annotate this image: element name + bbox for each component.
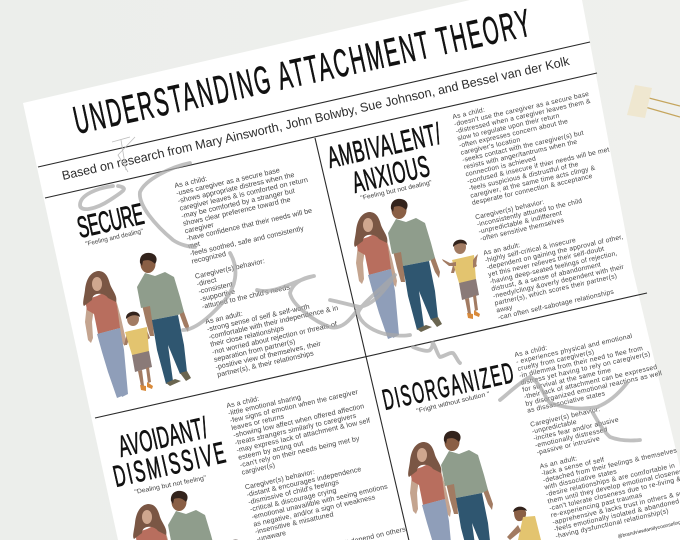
heading: disorganized: DISORGANIZED <box>379 356 516 416</box>
watermark <box>80 163 640 441</box>
illustration: secure family <box>83 253 191 398</box>
text block: avoidant: -distant & encourages independence <box>246 466 362 499</box>
text block: ambivalent: -distressed when a caregiver leaves them & <box>455 98 592 135</box>
text block: secure: -direct <box>196 276 217 288</box>
text block: disorganized: -their lack of attachment can be expressed <box>523 364 658 401</box>
text block: avoidant: -may express lack of attachment & low self <box>236 417 371 454</box>
tagline: ambivalent: "Feeling but not dealing" <box>360 179 433 202</box>
text block: ambivalent: -confused & insecure if thier needs will be met <box>466 146 610 185</box>
text block: disorganized: -in dilemma from their need to flee from <box>519 345 644 380</box>
text block: disorganized: -lack a sense of self <box>541 456 605 478</box>
text block: secure: separation from partner(s) <box>213 338 296 364</box>
text block: secure: -positive view of themselves, their <box>215 340 322 371</box>
text block: disorganized: - experiences physical and emotional <box>515 333 633 366</box>
text block: secure: caregiver <box>184 221 215 235</box>
text block: ambivalent: desperate for connection & acceptance <box>471 173 593 207</box>
text block: ambivalent: -inconsistently attuned to the child <box>476 198 583 228</box>
panel: secure <box>74 152 349 398</box>
text block: disorganized: -emotionally distressed <box>534 426 608 450</box>
text block: ambivalent: resists with anger/tantrums when the <box>463 139 578 171</box>
text block: avoidant: -showing low affect when offered affection <box>233 403 365 440</box>
heading: ambivalent: AMBIVALENT/ <box>324 118 444 175</box>
title: UNDERSTANDING ATTACHMENT THEORY <box>70 1 534 143</box>
text block: secure: -shows appropriate distress when the <box>177 171 295 205</box>
text block: avoidant: -emotional unavailible with seeing emotions <box>251 483 389 521</box>
illustration: ambivalent family <box>354 199 480 339</box>
text block: secure: their close relationships <box>210 324 285 349</box>
text block: secure: -attuned to the child's needs <box>201 283 291 311</box>
text block: avoidant: leaves or returns <box>231 413 285 432</box>
text block: ambivalent: -often expresses concern about the <box>458 118 569 150</box>
text block: ambivalent: Caregiver(s) behavior: <box>475 199 545 221</box>
text block: secure: -not worried about rejection or threats of <box>211 320 338 356</box>
text block: secure: met <box>187 240 201 250</box>
text block: secure: -uses caregiver as a secure base <box>175 166 281 198</box>
text block: ambivalent: -dependent on gaining the approval of other, <box>486 234 624 271</box>
text block: disorganized: with dissociative states <box>543 468 618 492</box>
text block: secure: -may be comforted by a stranger but <box>181 187 296 220</box>
text block: ambivalent: away <box>496 304 514 315</box>
text block: avoidant: -insensitive & misattuned <box>254 511 334 536</box>
text block: disorganized: distress yet having to rely on caregiver(s) <box>520 351 651 387</box>
illustration: disorganized family <box>408 431 541 540</box>
text block: secure: Caregiver(s) behavior: <box>194 257 265 281</box>
text block: secure: -supportive <box>199 288 236 303</box>
text block: ambivalent: caregiver's location <box>460 136 521 157</box>
text block: secure: -comfortable with their independence & in <box>208 304 339 341</box>
text block: ambivalent: caregiver, at the same time acts clingy & <box>470 165 596 200</box>
text block: secure: -feels soothed, safe and consistently <box>189 224 305 258</box>
text block: disorganized: -feels emotionally isolated & abandoned <box>553 498 680 533</box>
text block: disorganized: -incites fear and/or abusive <box>533 417 620 443</box>
text block: ambivalent: yet this never relieves their self-doubt <box>488 246 605 279</box>
text block: ambivalent: -can often self-sabotage relationships <box>497 289 615 322</box>
text block: disorganized: -having dysfunctional relationship(s) <box>555 508 670 540</box>
icon: binder clip <box>627 85 680 118</box>
text block: secure: As a child: <box>174 175 208 190</box>
heading: avoidant: DISMISSIVE <box>110 436 229 494</box>
tagline: disorganized: "Fright without solution " <box>416 391 490 415</box>
text block: avoidant: esteem by acting out <box>238 440 304 462</box>
text block: disorganized: -unpredictable <box>531 419 578 436</box>
logo mark <box>112 137 135 172</box>
text block: ambivalent: connection is achieved <box>465 156 537 178</box>
text block: ambivalent: -often sensitive themselves <box>479 217 565 243</box>
panel: ambivalent <box>324 81 643 339</box>
text block: ambivalent: As an adult: <box>483 242 521 257</box>
text block: disorganized: by disorganized emotional reactions as well <box>525 370 663 408</box>
text block: disorganized: -can't tolerate closeness due to re-living & <box>549 476 680 512</box>
text block: disorganized: cruelty from caregiver(s) <box>517 349 595 373</box>
text block: ambivalent: slow to regulate upon their return <box>457 113 560 142</box>
text block: disorganized: as dissassociative states <box>527 390 606 415</box>
text block: ambivalent: partner(s), which scores their partner(s) <box>494 273 618 307</box>
credit text: @brandviewfamilycounseling <box>617 520 680 540</box>
text block: disorganized: -desire relationships & are comfortable in <box>545 462 676 498</box>
text block: avoidant: cargiver(s) <box>241 462 276 477</box>
text block: avoidant: -treats strangers similarly to caregivers <box>234 413 357 447</box>
text block: ambivalent: -highly self-critical & insecure <box>484 237 577 264</box>
text block: avoidant: Caregiver(s) behavior: <box>244 469 316 491</box>
text block: secure: -consistent <box>198 280 233 296</box>
text block: avoidant: -critical & discourage crying <box>249 487 337 514</box>
text block: disorganized: Caregiver(s) behavior: <box>530 406 601 429</box>
text block: ambivalent: -needy/clingy &overly dependent with their <box>492 264 625 300</box>
text block: ambivalent: -having deep-seated feelings of rejection, <box>489 250 618 286</box>
heading: ambivalent <box>324 118 444 200</box>
text block: avoidant: -can't rely on their needs being met by <box>239 435 361 469</box>
heading: avoidant: AVOIDANT/ <box>115 412 211 464</box>
text block: avoidant: -dismissive of child's feelings <box>248 479 340 506</box>
text block: secure: -strong sense of self & self-worth <box>206 303 310 334</box>
text block: secure: shows clear preference toward the <box>182 196 291 228</box>
text block: disorganized: -passive or intrusive <box>536 435 601 457</box>
text block: ambivalent: distrust, & a sense of abandonment <box>491 261 602 293</box>
text block: avoidant: -little emotional sharing <box>228 394 302 417</box>
text block: ambivalent: As a child: <box>452 107 486 121</box>
tagline: avoidant: "Dealing but not feeling" <box>134 475 207 496</box>
text block: disorganized: for survival at the same time <box>522 367 612 394</box>
heading: avoidant <box>110 412 229 494</box>
text block: disorganized: As an adult: <box>539 455 578 471</box>
text block: avoidant: As a child: <box>226 396 260 410</box>
text block: disorganized: re-experiencing past traumas <box>550 492 643 519</box>
text block: disorganized: As a child: <box>514 345 548 359</box>
panel: disorganized <box>379 320 680 540</box>
text block: ambivalent: -seeks contact with the caregiver(s) but <box>462 130 584 164</box>
text block: ambivalent: -unpredictable & indifferent <box>478 210 563 236</box>
text block: ambivalent: -doesn't use the caregiver as a secure base <box>454 91 590 128</box>
text block: avoidant: -few signs of emotion when the caregiver <box>229 389 359 425</box>
illustration: avoidant family <box>133 491 255 540</box>
heading: ambivalent: ANXIOUS <box>349 150 433 200</box>
text block: secure: As an adult: <box>204 310 243 326</box>
subtitle: Based on research from Mary Ainsworth, John Bolwby, Sue Johnson, and Bessel van der Kolk <box>61 54 571 183</box>
panel: avoidant <box>110 371 407 540</box>
text block: ambivalent: -feels suspicious & distrustful of the <box>468 161 579 193</box>
text block: secure: partner(s), & their relationships <box>216 349 315 379</box>
text block: disorganized: -detached from their feelings & themselves <box>542 447 678 484</box>
tagline: secure: "Feeling and dealing" <box>85 228 144 248</box>
text block: secure: caregiver leaves & is comforted on return <box>179 176 309 213</box>
text block: secure: recognized <box>191 250 227 266</box>
text block: avoidant: as negative, and/or a sign of weakness <box>253 494 376 529</box>
text block: secure: -have confidence that their needs will be <box>186 207 313 243</box>
heading: secure: SECURE <box>74 198 147 245</box>
